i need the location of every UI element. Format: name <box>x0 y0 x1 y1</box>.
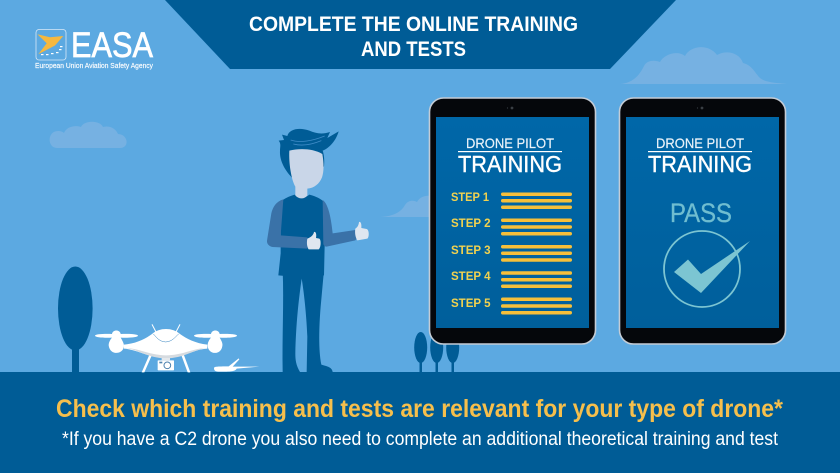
tablet screen <box>626 117 779 328</box>
icon: drone <box>95 324 259 372</box>
trees: small group <box>414 332 459 373</box>
step 1 <box>451 190 572 209</box>
person neck and face <box>289 149 324 198</box>
tree: large <box>58 266 93 373</box>
drone left rotor <box>95 330 138 353</box>
cloud: left <box>50 122 127 148</box>
tablet: pass result <box>620 98 786 344</box>
step 4 <box>451 269 572 288</box>
footnote: *If you have a C2 drone you also need to complete an additional theoretical training and test <box>62 429 779 450</box>
person hair <box>279 129 339 178</box>
title: AND TESTS <box>361 38 466 61</box>
step 2 <box>451 216 572 236</box>
tablet heading <box>648 135 752 177</box>
tablet heading: DRONE PILOT <box>466 135 554 151</box>
pass label: PASS <box>670 198 732 228</box>
tablet camera <box>507 107 513 109</box>
step 5: STEP 5 <box>451 296 491 310</box>
person <box>267 129 369 372</box>
cloud: behind tablet <box>381 196 432 217</box>
tablet camera <box>697 107 703 109</box>
icon: logo bird <box>36 30 66 60</box>
tablet heading: TRAINING <box>458 151 562 177</box>
cloud: top right <box>620 47 787 84</box>
logo wordmark: EASA <box>71 26 154 65</box>
person near arm <box>267 199 307 249</box>
tablet heading <box>458 135 562 177</box>
tablet heading: TRAINING <box>648 151 752 177</box>
drone legs <box>142 353 190 372</box>
title: COMPLETE THE ONLINE TRAINING <box>249 13 578 36</box>
logo tagline: European Union Aviation Safety Agency <box>35 61 153 70</box>
tablet: training steps <box>430 98 596 344</box>
step 4: STEP 4 <box>451 269 491 283</box>
person torso <box>278 195 325 276</box>
tablet screen <box>436 117 589 328</box>
step 3: STEP 3 <box>451 243 491 257</box>
bottom heading: Check which training and tests are relevant for your type of drone* <box>56 395 783 423</box>
drone antennas <box>152 324 180 332</box>
title <box>249 13 578 61</box>
step 1: STEP 1 <box>451 190 489 204</box>
person far arm <box>323 200 357 247</box>
tablet body <box>620 98 786 344</box>
person left hand <box>355 222 369 240</box>
person right hand <box>307 232 321 249</box>
tablet heading: DRONE PILOT <box>656 135 744 151</box>
logo: EASA <box>35 26 154 70</box>
drone camera <box>158 360 174 370</box>
tablet body <box>430 98 596 344</box>
ground band <box>0 372 840 473</box>
drone controller <box>214 358 259 372</box>
drone body <box>124 329 207 358</box>
title banner <box>165 0 676 69</box>
icon: check mark in circle <box>664 231 750 307</box>
step 2: STEP 2 <box>451 216 491 230</box>
person legs <box>283 270 333 372</box>
drone right rotor <box>194 330 237 353</box>
step 3 <box>451 243 572 262</box>
step 5 <box>451 296 572 314</box>
